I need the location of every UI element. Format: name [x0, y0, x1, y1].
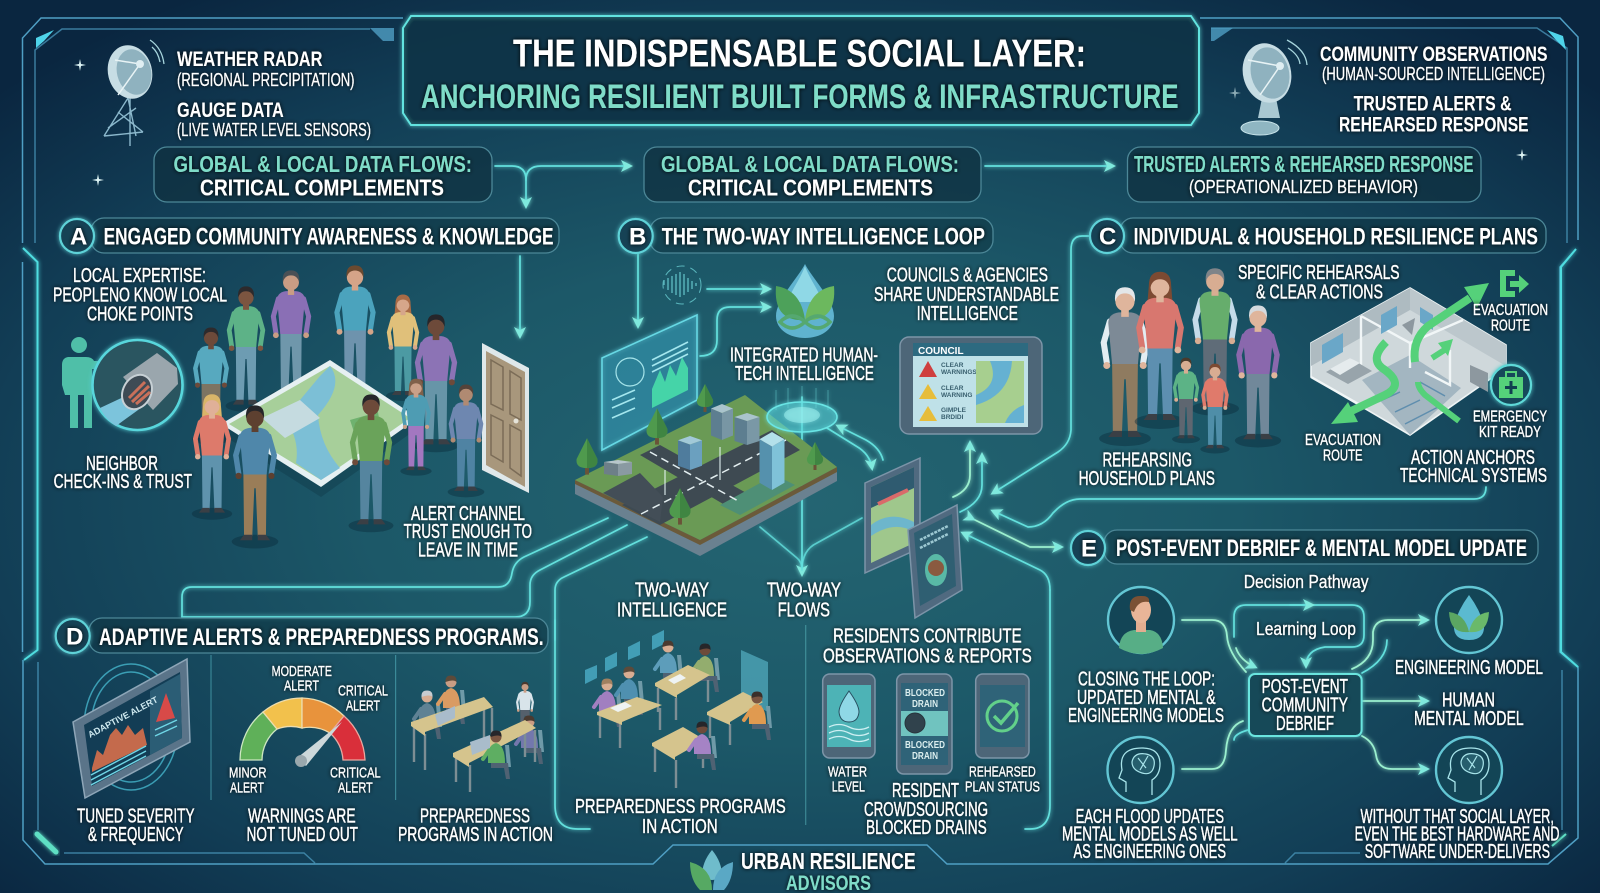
people behind map: [192, 265, 458, 452]
labels: panel C: ROUTE: [1323, 448, 1362, 465]
isometric city block: [575, 384, 837, 556]
logo text: URBAN RESILIENCE: [741, 848, 916, 874]
labels: panel C: REHEARSING: [1102, 450, 1192, 472]
labels: two-way: TWO-WAY: [767, 580, 841, 602]
gauge labels: ALERT: [338, 780, 373, 797]
icon: weather radar tower: [102, 40, 164, 146]
phone: blocked drain: DRAIN: [912, 750, 938, 762]
labels: residents: REHEARSED: [969, 764, 1036, 781]
labels: panel C: EMERGENCY: [1473, 409, 1547, 426]
people in front of map: [192, 379, 484, 548]
labels: panel A: PEOPLENO KNOW LOCAL: [53, 285, 227, 307]
divider centre: [805, 625, 807, 825]
labels: panel E: ENGINEERING MODELS: [1068, 705, 1224, 727]
labels: panel B upper: INTEGRATED HUMAN-: [730, 345, 878, 367]
council tablet: [900, 337, 1042, 434]
labels: panel D: WARNINGS ARE: [248, 806, 356, 828]
labels: residents: RESIDENT: [892, 780, 959, 802]
sparkles: [74, 59, 1528, 186]
labels: preparedness: RESIDENTS CONTRIBUTE: [833, 626, 1022, 648]
title text: ANCHORING RESILIENT BUILT FORMS & INFRASTRUCTURE: [421, 78, 1178, 116]
panel: trusted alerts: [1128, 147, 1481, 202]
panel: data flows 1: [154, 147, 492, 202]
labels: residents: PLAN STATUS: [965, 779, 1040, 796]
labels: preparedness: OBSERVATIONS & REPORTS: [823, 646, 1032, 668]
gauge labels: ALERT: [346, 698, 380, 715]
gauge labels: CRITICAL: [338, 683, 388, 700]
gauge labels: [229, 663, 388, 797]
section header D: ADAPTIVE ALERTS & PREPAREDNESS PROGRAMS.: [99, 624, 544, 651]
warning list: CLEAR: [941, 385, 964, 392]
labels: panel D: [77, 806, 553, 846]
floor plan with evacuation arrows: [1311, 283, 1506, 435]
icon: integrated water drop logo: [776, 264, 834, 338]
labels: panel A: [53, 265, 532, 562]
logo mark: [690, 850, 733, 890]
labels: two-way: INTELLIGENCE: [617, 600, 727, 622]
labels: preparedness: PREPAREDNESS PROGRAMS: [575, 796, 786, 818]
debrief box: POST-EVENT: [1262, 676, 1348, 698]
section header B: [619, 218, 993, 253]
warning list: CLEAR: [941, 362, 964, 369]
labels: two-way: FLOWS: [778, 600, 830, 622]
data source labels: right: REHEARSED RESPONSE: [1339, 114, 1529, 137]
debrief box: COMMUNITY: [1262, 695, 1348, 717]
labels: panel E: EACH FLOOD UPDATES: [1076, 806, 1224, 828]
section header E: [1071, 530, 1538, 565]
title text: [421, 32, 1178, 116]
debrief flow lines: [1182, 605, 1427, 769]
labels: panel B upper: [730, 265, 1059, 385]
phone: blocked drain: BLOCKED: [905, 739, 945, 751]
tablet map: [976, 361, 1024, 423]
labels: panel D: NOT TUNED OUT: [246, 824, 358, 846]
adaptive alert tablet: ADAPTIVE ALERT: [86, 694, 160, 740]
data source labels: right: [1320, 43, 1548, 137]
labels: two-way: TWO-WAY: [635, 580, 709, 602]
labels: two-way: [617, 580, 841, 622]
icon: brain head left: [1108, 737, 1174, 803]
warning list: WARNINGS: [941, 369, 977, 376]
section header D: D: [66, 624, 83, 650]
scene: community around map: [192, 265, 529, 548]
labels: panel E: UPDATED MENTAL &: [1077, 687, 1216, 709]
logo: urban resilience advisors: [690, 848, 916, 893]
panel: data flows 2: CRITICAL COMPLEMENTS: [688, 175, 933, 201]
icon: blocked pipe: [92, 340, 182, 430]
labels: panel C: ROUTE: [1491, 318, 1530, 335]
labels: panel E: MENTAL MODEL: [1414, 708, 1524, 730]
alert gauge: [240, 698, 365, 767]
scene: training desks: [411, 676, 544, 792]
debrief box: [1249, 674, 1362, 736]
data source labels: left: (LIVE WATER LEVEL SENSORS): [177, 120, 371, 140]
section header B: B: [629, 224, 646, 250]
data source labels: right: TRUSTED ALERTS &: [1354, 93, 1512, 116]
phone: blocked drain: BLOCKED: [905, 687, 945, 699]
labels: panel E: CLOSING THE LOOP:: [1078, 669, 1215, 691]
scene: family: [1099, 268, 1281, 453]
labels: panel A: CHECK-INS & TRUST: [54, 471, 192, 493]
divider lines D: [211, 655, 396, 800]
labels: panel C: HOUSEHOLD PLANS: [1079, 468, 1215, 490]
panel: data flows 2: GLOBAL & LOCAL DATA FLOWS:: [661, 151, 959, 177]
labels: panel A: LEAVE IN TIME: [418, 540, 518, 562]
section header E: E: [1081, 536, 1097, 562]
gauge labels: MODERATE: [272, 663, 332, 680]
data source labels: left: WEATHER RADAR: [177, 48, 322, 71]
glowing beacon: [767, 386, 837, 432]
title panel: [403, 16, 1199, 125]
labels: panel C: & CLEAR ACTIONS: [1256, 282, 1383, 304]
labels: panel A: NEIGHBOR: [86, 453, 158, 475]
gauge labels: ALERT: [284, 678, 319, 695]
icon: person pointing: [62, 337, 116, 428]
icon: radar sweep: [663, 266, 701, 304]
icon: engineering model: [1436, 587, 1502, 653]
labels: panel C: SPECIFIC REHEARSALS: [1238, 262, 1400, 284]
labels: panel E: Decision Pathway: [1244, 572, 1369, 592]
panel: trusted alerts: (OPERATIONALIZED BEHAVIOR): [1189, 177, 1418, 197]
labels: residents: WATER: [828, 764, 867, 781]
labels: panel A: ALERT CHANNEL: [411, 503, 525, 525]
labels: panel E: MENTAL MODELS AS WELL: [1062, 824, 1238, 846]
resident phones: [865, 458, 962, 618]
labels: panel D: & FREQUENCY: [88, 824, 184, 846]
labels: residents: CROWDSOURCING: [864, 799, 988, 821]
labels: residents: LEVEL: [832, 779, 865, 796]
labels: panel B upper: SHARE UNDERSTANDABLE: [874, 284, 1059, 306]
icon: person thinking: [1108, 587, 1174, 654]
data source labels: left: (REGIONAL PRECIPITATION): [177, 70, 354, 90]
labels: panel B upper: COUNCILS & AGENCIES: [887, 265, 1048, 287]
logo text: [741, 848, 916, 893]
labels: panel A: CHOKE POINTS: [87, 304, 193, 326]
section header A: A: [70, 224, 87, 250]
scene: preparedness programs classroom: [585, 630, 772, 788]
icon: brain head right: [1436, 737, 1502, 803]
icon: exit door: [1500, 270, 1529, 297]
labels: residents: [828, 764, 1040, 839]
labels: panel B upper: TECH INTELLIGENCE: [735, 363, 874, 385]
adaptive alert tablet: [73, 659, 190, 798]
labels: preparedness: IN ACTION: [642, 816, 718, 838]
data source labels: left: GAUGE DATA: [177, 99, 284, 122]
labels: panel C: EVACUATION: [1473, 302, 1548, 319]
holographic dashboard: [602, 315, 697, 450]
phone: blocked drain: DRAIN: [912, 698, 938, 710]
title text: THE INDISPENSABLE SOCIAL LAYER:: [513, 32, 1086, 76]
panel: data flows 1: CRITICAL COMPLEMENTS: [200, 175, 444, 201]
warning list: GIMPLE: [941, 407, 967, 414]
phone: blocked drain: [897, 674, 952, 774]
debrief box: DEBRIEF: [1276, 713, 1334, 735]
data source labels: left: [177, 48, 371, 140]
section header C: [1090, 218, 1546, 253]
labels: panel D: PROGRAMS IN ACTION: [398, 824, 553, 846]
section header C: C: [1099, 224, 1116, 250]
labels: panel E: [1062, 572, 1560, 863]
gauge labels: MINOR: [229, 765, 267, 782]
labels: panel E: AS ENGINEERING ONES: [1074, 841, 1226, 863]
icon: emergency kit: [1491, 365, 1531, 405]
map table: [221, 360, 418, 497]
gauge labels: CRITICAL: [330, 765, 381, 782]
icon: satellite dish: [1236, 38, 1307, 135]
labels: panel C: KIT READY: [1479, 424, 1541, 441]
labels: preparedness: [575, 626, 1032, 838]
warning list: [919, 361, 977, 421]
council tablet: COUNCIL: [918, 346, 964, 357]
panel: data flows 1: GLOBAL & LOCAL DATA FLOWS:: [174, 151, 472, 177]
labels: panel C: EVACUATION: [1305, 432, 1381, 449]
door: [482, 343, 529, 493]
labels: panel D: PREPAREDNESS: [420, 806, 530, 828]
section header D: [56, 618, 548, 653]
labels: residents: BLOCKED DRAINS: [866, 817, 987, 839]
labels: panel D: TUNED SEVERITY: [77, 806, 194, 828]
labels: panel B upper: INTELLIGENCE: [917, 303, 1018, 325]
section header A: ENGAGED COMMUNITY AWARENESS & KNOWLEDGE: [104, 223, 554, 250]
section header A: [60, 218, 559, 253]
labels: panel C: ACTION ANCHORS: [1411, 447, 1535, 469]
arrows: connector network: [182, 166, 1486, 829]
warning list: BRDIDI: [941, 414, 964, 421]
gauge labels: ALERT: [230, 780, 264, 797]
labels: panel E: HUMAN: [1442, 690, 1495, 712]
labels: panel C: [1079, 262, 1548, 490]
panel: data flows 2: [644, 147, 981, 202]
labels: panel A: LOCAL EXPERTISE:: [73, 265, 206, 287]
labels: panel A: TRUST ENOUGH TO: [404, 521, 532, 543]
warning list: WARNING: [941, 392, 972, 399]
phone: plan status: [976, 674, 1029, 758]
labels: panel E: Learning Loop: [1256, 619, 1356, 639]
green evacuation arrows: [1331, 283, 1489, 424]
phone: water level: [823, 674, 875, 758]
section header B: THE TWO-WAY INTELLIGENCE LOOP: [662, 223, 985, 250]
